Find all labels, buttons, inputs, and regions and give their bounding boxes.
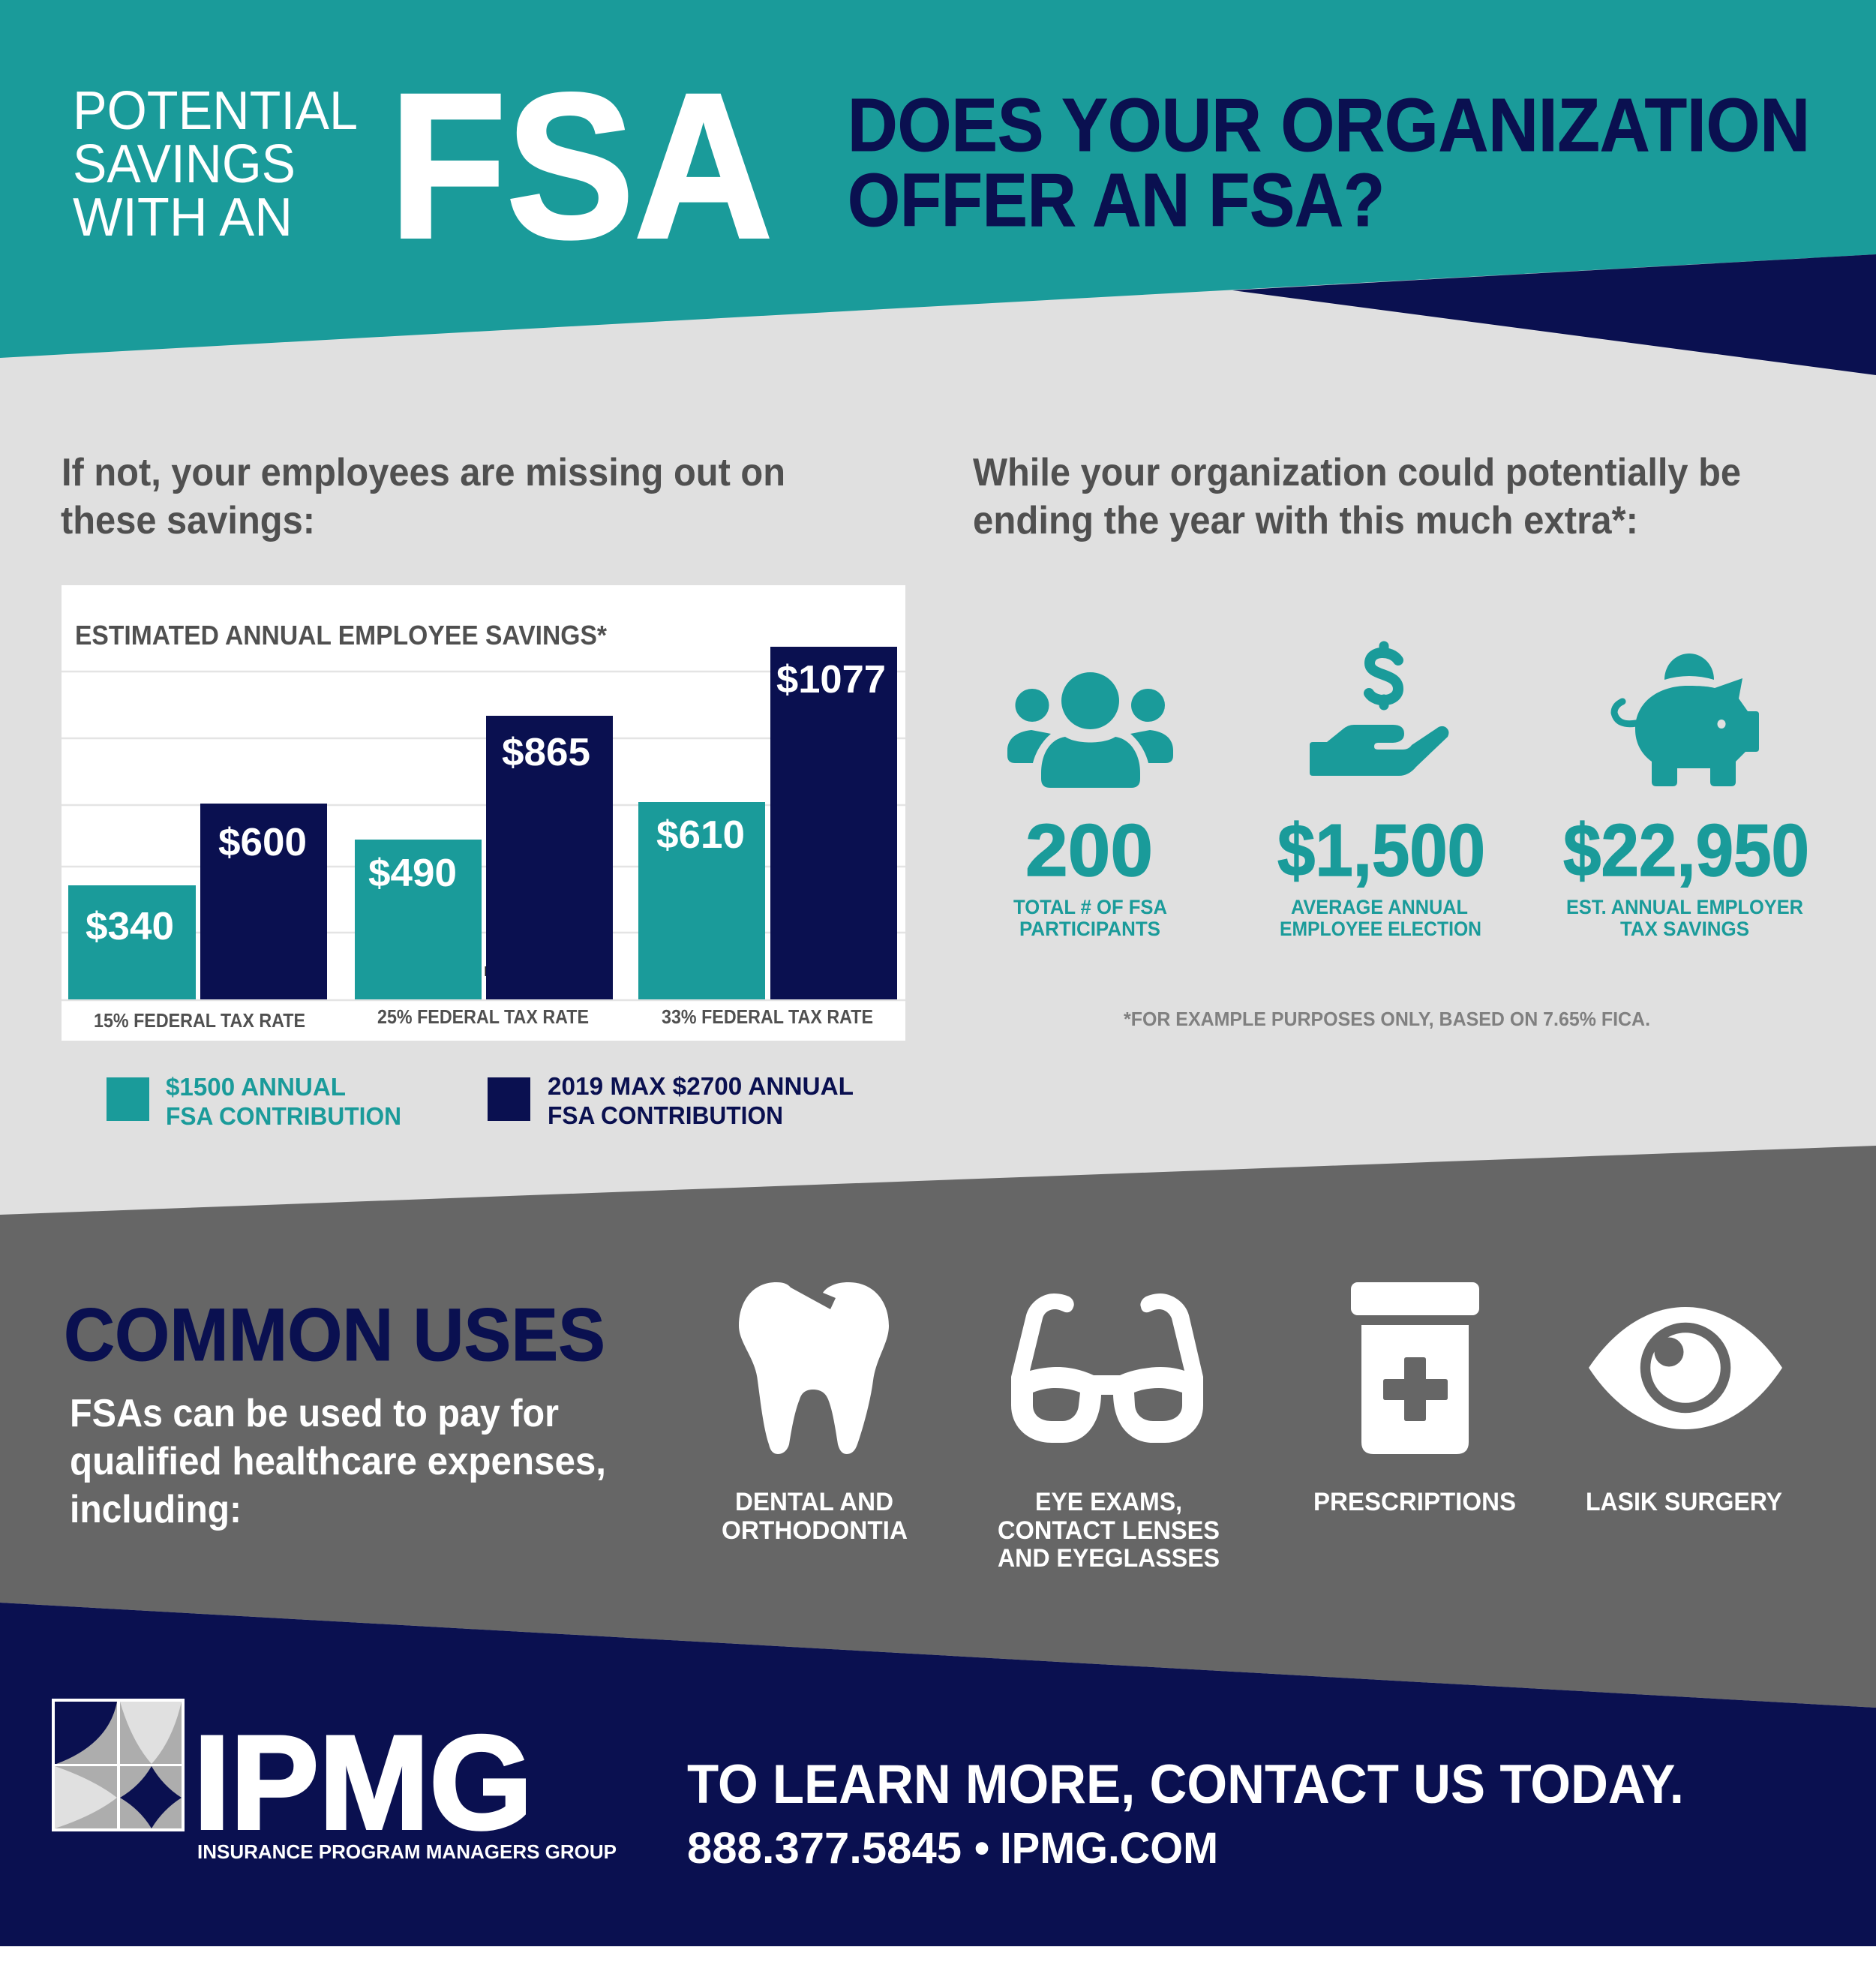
header band (0, 0, 1876, 375)
contact details (687, 1824, 1218, 1873)
stat: employee election: EMPLOYEE ELECTION (1280, 918, 1481, 940)
heading: does your organization offer an FSA (848, 83, 1810, 242)
bars: 33% tax rate: $610 (656, 813, 745, 857)
bars: 15% tax rate (68, 804, 327, 999)
title: potential savings with an FSA: POTENTIAL (73, 81, 358, 141)
intro text: organization savings: ending the year with this much extra*: (973, 499, 1638, 542)
use: eye exams: CONTACT LENSES (998, 1516, 1220, 1545)
icon: piggy bank (1614, 653, 1759, 786)
bars: 25% tax rate (355, 716, 613, 999)
icon: tooth (739, 1282, 889, 1454)
legend: $1500 ANNUAL (166, 1073, 346, 1101)
intro text: organization savings: While your organization could potentially be (973, 451, 1741, 494)
title: potential savings with an FSA: FSA (389, 51, 773, 281)
contact details: • (974, 1824, 989, 1873)
title: potential savings with an FSA: WITH AN (73, 188, 293, 248)
text: common uses description: qualified healthcare expenses, (70, 1440, 606, 1483)
use: eye exams (998, 1293, 1220, 1573)
text: common uses description (70, 1392, 606, 1531)
stat: employer tax savings (1563, 653, 1809, 940)
contact details: IPMG.COM (1000, 1824, 1218, 1873)
icon: glasses (1011, 1293, 1203, 1443)
text: common uses description: including: (70, 1488, 242, 1531)
heading: does your organization offer an FSA: OFFER AN FSA? (848, 158, 1385, 242)
use: prescriptions: PRESCRIPTIONS (1313, 1488, 1516, 1516)
logo mark (52, 1699, 185, 1831)
bars: 33% tax rate: $1077 (776, 658, 886, 702)
axis labels: 25% FEDERAL TAX RATE (377, 1005, 589, 1028)
stat: employee election (1277, 646, 1485, 940)
intro text: employee savings (61, 451, 785, 542)
contact details: 888.377.5845 (687, 1824, 962, 1873)
bar chart panel (62, 585, 905, 1041)
intro text: employee savings: these savings: (61, 499, 315, 542)
use: eye exams: EYE EXAMS, (1035, 1488, 1182, 1516)
heading: common uses: COMMON USES (64, 1293, 605, 1376)
text: common uses description: FSAs can be used to pay for (70, 1392, 559, 1435)
stat: participants: TOTAL # OF FSA (1013, 896, 1167, 918)
bars: 15% tax rate: $340 (86, 905, 174, 948)
bars: 33% tax rate (638, 647, 897, 999)
logo wordmark: IPMG (194, 1708, 533, 1857)
navy corner triangle (1232, 254, 1876, 375)
chart title: ESTIMATED ANNUAL EMPLOYEE SAVINGS* (75, 620, 607, 650)
legend: FSA CONTRIBUTION (166, 1102, 401, 1130)
use: eye exams: AND EYEGLASSES (998, 1544, 1220, 1573)
axis labels: 33% FEDERAL TAX RATE (662, 1005, 873, 1028)
icon: hand with dollar (1310, 646, 1448, 776)
intro text: employee savings: If not, your employees are missing out on (62, 451, 785, 494)
stat: employer tax savings: $22,950 (1563, 809, 1809, 891)
title: potential savings with an FSA (73, 51, 773, 281)
bars: 15% tax rate: $600 (218, 821, 307, 864)
use: dental: DENTAL AND (735, 1488, 893, 1516)
legend: FSA CONTRIBUTION (548, 1101, 783, 1129)
footer band (0, 1603, 1876, 1946)
logo tagline: INSURANCE PROGRAM MANAGERS GROUP (197, 1840, 617, 1863)
use: dental: ORTHODONTIA (722, 1516, 908, 1545)
bars: 25% tax rate: $490 (368, 852, 457, 895)
legend: 2019 MAX $2700 ANNUAL (548, 1072, 854, 1100)
icon: eye (1589, 1307, 1782, 1429)
contact call to action: TO LEARN MORE, CONTACT US TODAY. (687, 1754, 1684, 1815)
use: lasik surgery (1586, 1307, 1782, 1516)
legend (107, 1072, 854, 1130)
panel: common uses (0, 1146, 1876, 1708)
heading: does your organization offer an FSA: DOES YOUR ORGANIZATION (848, 83, 1810, 167)
use: prescriptions (1313, 1282, 1516, 1516)
axis labels (94, 1005, 873, 1032)
use: dental (722, 1282, 908, 1545)
icon: people (1007, 672, 1173, 788)
stat: participants: PARTICIPANTS (1019, 918, 1160, 940)
footnote: *FOR EXAMPLE PURPOSES ONLY, BASED ON 7.65% FICA. (1124, 1008, 1650, 1030)
stat: employee election: AVERAGE ANNUAL (1291, 896, 1468, 918)
title: potential savings with an FSA: SAVINGS (73, 134, 296, 194)
stat: employee election: $1,500 (1277, 809, 1485, 891)
axis labels: 15% FEDERAL TAX RATE (94, 1009, 305, 1032)
stat: employer tax savings: TAX SAVINGS (1620, 918, 1749, 940)
stat: participants: 200 (1025, 809, 1153, 891)
use: lasik surgery: LASIK SURGERY (1586, 1488, 1782, 1516)
icon: prescription bottle (1351, 1282, 1479, 1454)
bars: 25% tax rate: $865 (502, 731, 590, 774)
stat: participants (1007, 672, 1173, 940)
intro text: organization savings (973, 451, 1741, 542)
stat: employer tax savings: EST. ANNUAL EMPLOYER (1566, 896, 1803, 918)
